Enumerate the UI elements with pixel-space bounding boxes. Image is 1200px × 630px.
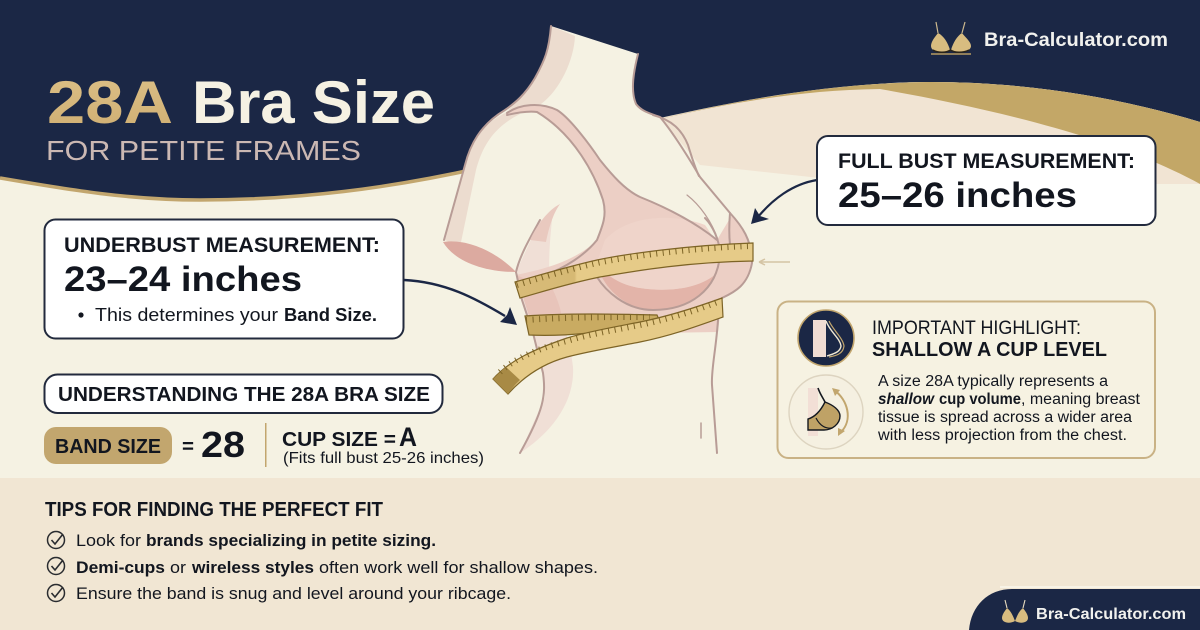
callout: full bust measurement: 25–26 inches: [838, 176, 1077, 215]
arm cut: [443, 241, 516, 272]
arrow: underbust: [404, 280, 517, 325]
cup size equation: (Fits full bust 25-26 inches): [283, 450, 484, 467]
back tape: [525, 314, 660, 335]
callout: underbust measurement: This determines your: [95, 305, 278, 325]
icon: bra logo: [931, 22, 971, 54]
highlight description: [877, 373, 1141, 444]
panel: tips background: [0, 478, 1200, 630]
tips heading: TIPS FOR FINDING THE PERFECT FIT: [45, 498, 383, 521]
cup size equation: [282, 422, 484, 467]
callout: underbust measurement: [44, 220, 404, 338]
band size equation: BAND SIZE: [55, 436, 161, 458]
tip 2: wireless styles: [191, 558, 314, 577]
tip 3: Ensure the band is snug and level around your ribcage.: [76, 584, 511, 603]
back tape ticks: [526, 317, 650, 320]
lower tape shaded end: [493, 367, 520, 394]
arm crease: [530, 204, 560, 242]
tip 1: brands specializing in petite sizing.: [146, 531, 436, 550]
shoulder shading: [445, 112, 520, 247]
arrow: tape level marker: [759, 259, 790, 265]
tip 2: or: [170, 558, 186, 577]
tip 1: Look for: [76, 531, 141, 550]
lower tape: [493, 298, 723, 394]
highlight description: tissue is spread across a wider area: [878, 409, 1132, 426]
arrow: full bust: [751, 180, 817, 224]
neck shading: [508, 26, 575, 110]
band size equation: [44, 424, 245, 465]
logo: bottom right badge: Bra-Calculator.com: [1036, 606, 1186, 623]
lower tape ticks: [500, 301, 720, 372]
title: [47, 69, 435, 136]
subtitle: FOR PETITE FRAMES: [46, 135, 361, 166]
torso silhouette: [443, 26, 752, 453]
heading: understanding the 28A bra size: [44, 374, 442, 413]
upper tape: [515, 243, 753, 298]
cup size equation: A: [399, 422, 417, 452]
tip 2: Demi-cups: [76, 558, 165, 577]
icon: cup depth diagram: [789, 375, 863, 449]
side shading: [517, 220, 573, 453]
highlight heading: SHALLOW A CUP LEVEL: [872, 339, 1107, 361]
band size equation: 28: [201, 424, 245, 465]
highlight description: A size 28A typically represents a: [878, 373, 1108, 390]
divider: [265, 423, 266, 467]
callout: full bust measurement: [817, 136, 1156, 225]
heading: understanding the 28A bra size: UNDERSTANDING THE 28A BRA SIZE: [58, 384, 430, 406]
band shading: [516, 275, 562, 335]
upper tape ticks: [517, 246, 751, 285]
logo: bottom right badge: [969, 587, 1200, 630]
highlight description: cup volume: [939, 391, 1021, 408]
icon: shallow profile in navy circle: [798, 310, 854, 366]
callout: underbust measurement: Band Size.: [284, 305, 377, 325]
tip 2: often work well for shallow shapes.: [319, 558, 598, 577]
panel: important highlight: [778, 302, 1155, 458]
highlight heading: IMPORTANT HIGHLIGHT:: [872, 318, 1081, 339]
figure outlines: [444, 26, 752, 453]
callout: full bust measurement: FULL BUST MEASUREMENT:: [838, 150, 1135, 173]
cup crescent: [597, 258, 720, 310]
callout: underbust measurement: UNDERBUST MEASUREMENT:: [64, 234, 380, 257]
cup fill: [597, 218, 718, 290]
cup size equation: CUP SIZE =: [282, 429, 396, 451]
title: Bra Size: [192, 69, 435, 136]
tip 2: [48, 558, 598, 577]
band size equation: =: [182, 436, 194, 458]
highlight description: shallow: [878, 391, 935, 408]
callout: underbust measurement: 23–24 inches: [64, 260, 302, 299]
bra fabric: [507, 105, 752, 335]
figure: torso with bra and measuring tape: [443, 26, 753, 453]
icon: bra logo small: [1002, 600, 1028, 623]
highlight description: with less projection from the chest.: [877, 427, 1127, 444]
highlight heading: [872, 318, 1107, 361]
panel: tips for finding the perfect fit: [45, 498, 598, 603]
logo: top right: Bra-Calculator.com: [984, 30, 1168, 51]
logo: top right: [931, 22, 1168, 54]
title: 28A: [47, 69, 173, 136]
highlight description: , meaning breast: [1021, 391, 1141, 408]
